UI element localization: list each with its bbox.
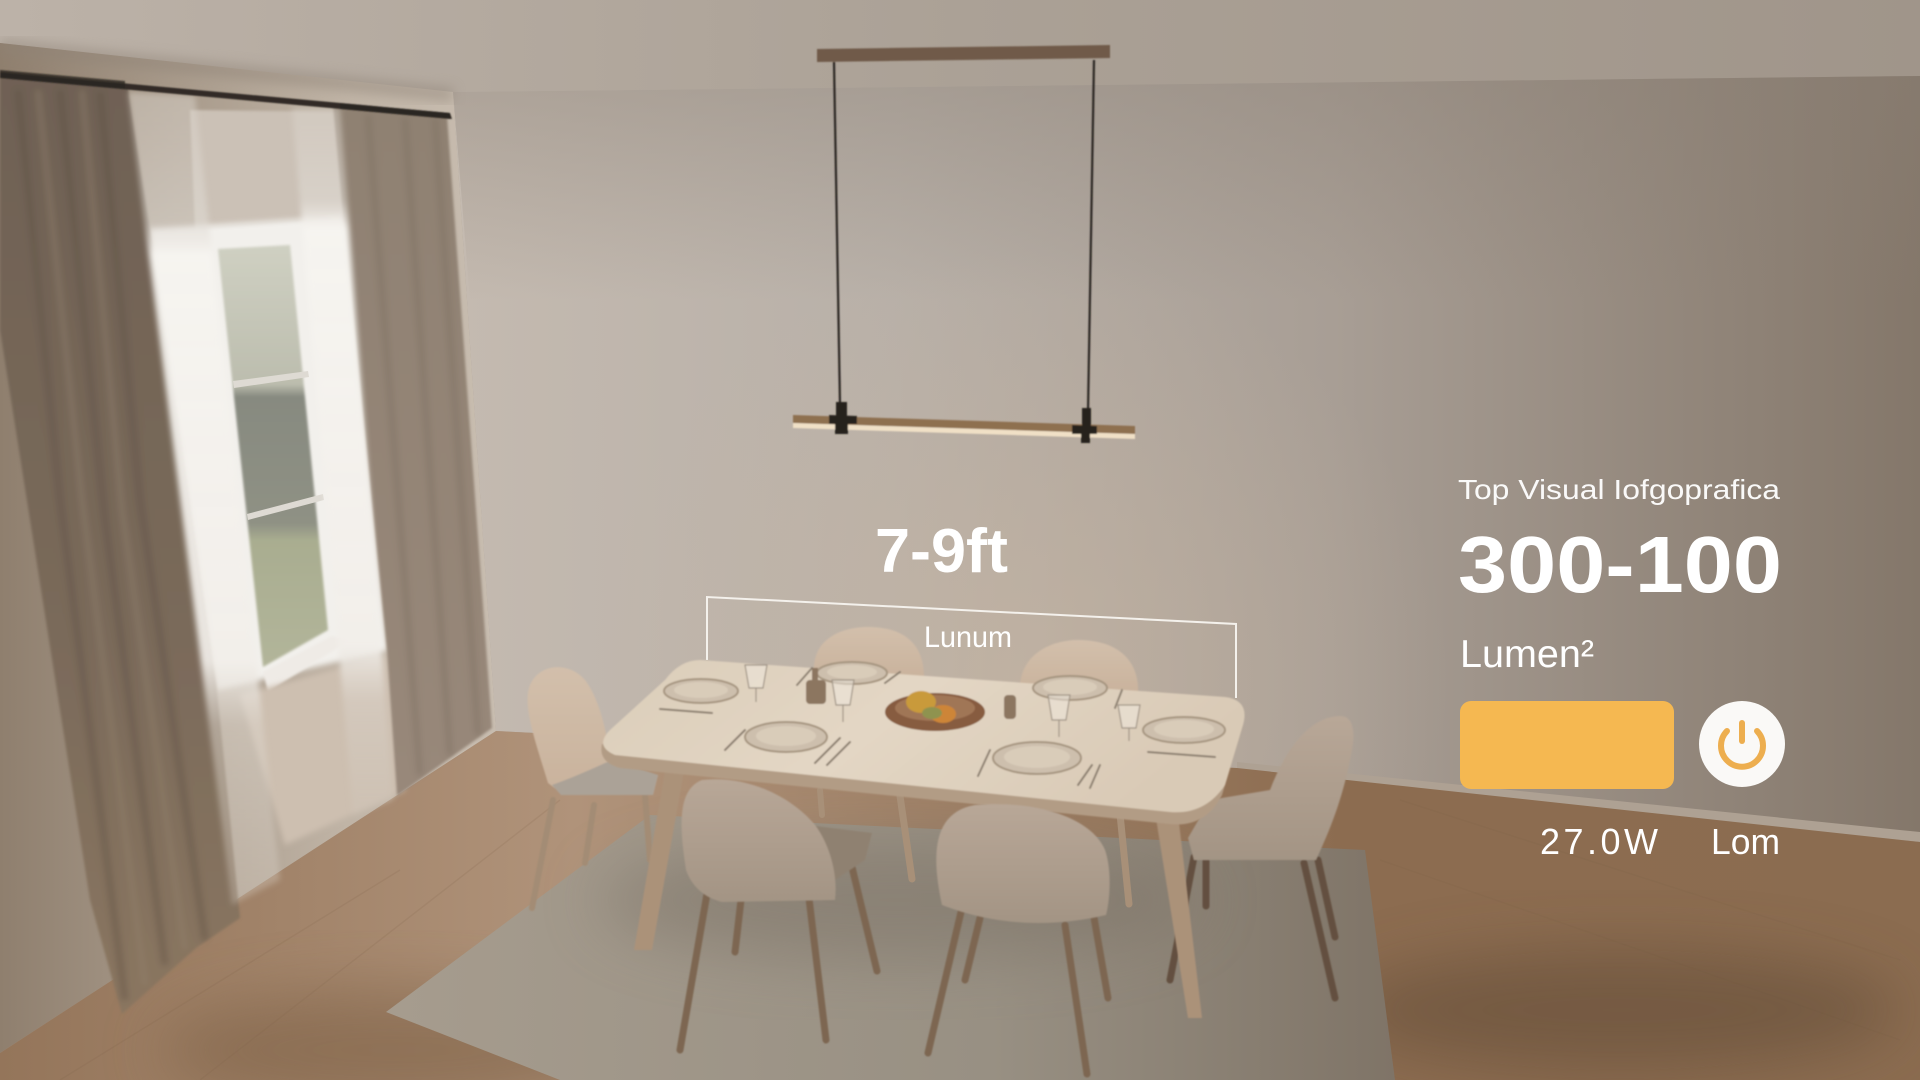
- right chair: [1170, 716, 1353, 998]
- table front legs: [634, 771, 1202, 1018]
- right curtain: [333, 105, 492, 796]
- left curtain: [0, 76, 240, 1014]
- bottles: [806, 668, 1016, 719]
- pendant lamp: [793, 45, 1135, 443]
- glasses: [745, 665, 1140, 741]
- yellow colour swatch: [1460, 701, 1674, 789]
- lom label: Lom: [1711, 821, 1780, 862]
- back wall: [453, 76, 1920, 842]
- table top: [603, 660, 1245, 812]
- height label: 7-9ft: [875, 517, 1008, 586]
- lumen value: 300-100: [1458, 520, 1782, 609]
- side wall: [0, 43, 496, 1053]
- light bar: [793, 402, 1135, 443]
- dining table: [601, 660, 1245, 1018]
- lumen unit: Lumen²: [1460, 633, 1594, 676]
- front left chair: [680, 779, 877, 1050]
- curtain rod: [0, 70, 452, 119]
- front middle chair: [928, 804, 1110, 1074]
- ceiling canopy: [817, 45, 1110, 62]
- window glass: [218, 245, 328, 667]
- left chair: [528, 667, 658, 908]
- floor: [0, 731, 1920, 1080]
- icon: power button: [1699, 701, 1785, 787]
- info panel: [1458, 474, 1785, 862]
- window sill: [263, 636, 350, 692]
- rug: [386, 815, 1395, 1080]
- fruit bowl: [885, 691, 985, 731]
- ceiling: [0, 0, 1920, 94]
- place settings: [660, 662, 1225, 788]
- table back legs: [820, 790, 1129, 904]
- window: [150, 110, 405, 845]
- back chairs: [814, 627, 1138, 695]
- suspension wires: [834, 60, 1094, 412]
- outline box: lumen zone: [707, 597, 1236, 698]
- panel heading: Top Visual Iofgoprafica: [1458, 474, 1780, 505]
- sheer curtains: [128, 92, 393, 905]
- table underside: [601, 725, 1243, 824]
- wattage label: 27.0W: [1540, 821, 1658, 862]
- label: lunum: Lunum: [924, 621, 1012, 654]
